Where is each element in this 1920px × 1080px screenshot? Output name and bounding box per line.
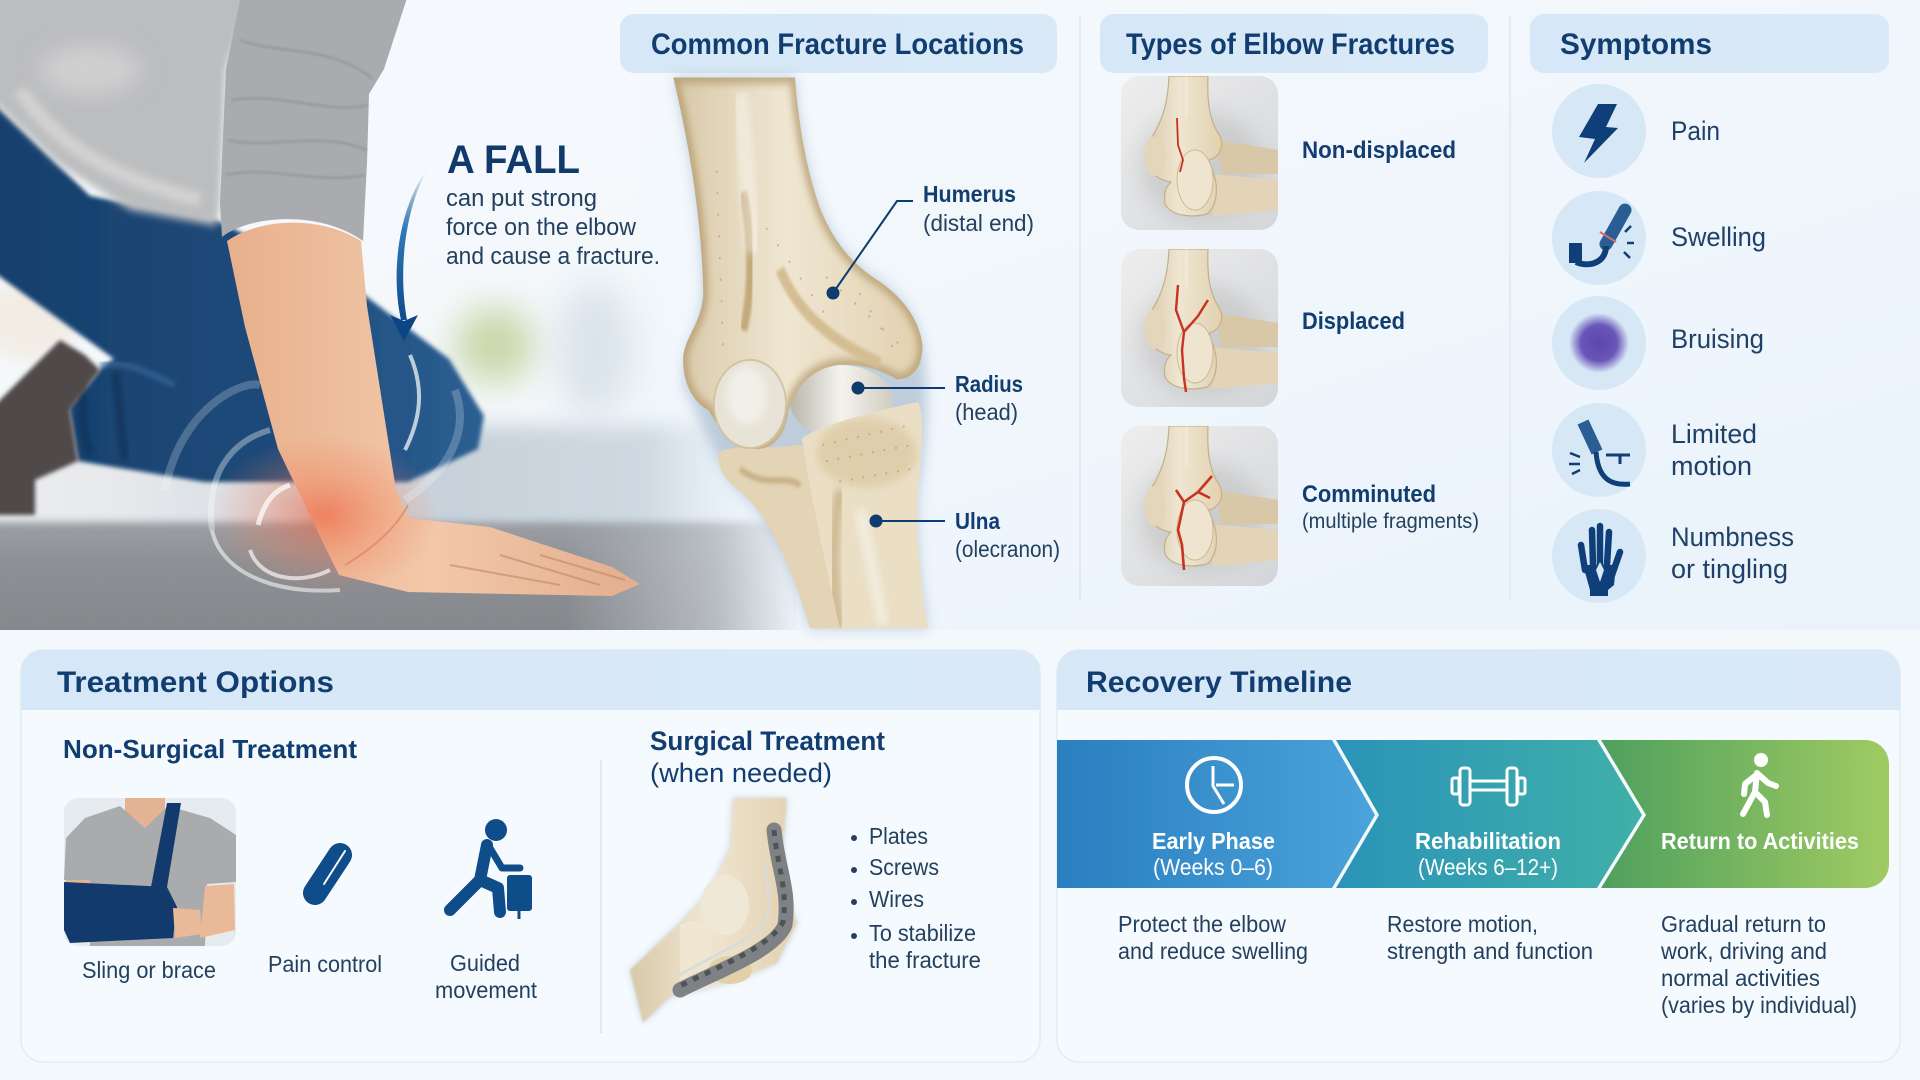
callout: radius: (head) — [955, 399, 1018, 425]
step: return to activities: Return to Activities — [1661, 828, 1859, 854]
callout: radius: Radius — [955, 371, 1023, 397]
panel: recovery timeline — [1057, 650, 1900, 1062]
symptom: bruising — [1552, 296, 1764, 390]
symptom: pain — [1552, 84, 1720, 178]
subheading: surgical: (when needed) — [650, 758, 832, 788]
text: rehabilitation details: strength and function — [1387, 938, 1593, 964]
shirt sleeve — [220, 0, 408, 241]
fracture: comminuted: (multiple fragments) — [1302, 510, 1479, 533]
illustration: elbow with plate — [630, 798, 797, 1023]
callout: a fall: A FALL — [447, 138, 580, 182]
text: return to activities details: (varies by individual) — [1661, 992, 1857, 1018]
icon: guided movement figure — [450, 819, 532, 919]
impact rings — [165, 355, 460, 591]
list: surgical hardware: To stabilize — [869, 920, 976, 946]
symptom: numbness or tingling: Numbness — [1671, 522, 1794, 552]
callout: radius — [852, 371, 1023, 425]
text: early phase details — [1118, 911, 1308, 964]
callout: humerus — [826, 181, 1034, 300]
callout: ulna — [870, 508, 1060, 562]
callout: a fall: force on the elbow — [446, 214, 637, 241]
subheading: surgical: Surgical Treatment — [650, 726, 885, 756]
jeans — [0, 80, 484, 482]
arrow: downward force — [390, 170, 427, 341]
panel: symptoms — [1530, 14, 1889, 603]
fracture: comminuted — [1121, 426, 1479, 586]
step: return to activities — [1601, 740, 1889, 888]
impact glow — [220, 448, 430, 586]
text: return to activities details — [1660, 911, 1857, 1018]
elbow bone illustration — [673, 78, 928, 628]
icon: pill — [315, 851, 345, 893]
fracture: displaced: Displaced — [1302, 308, 1405, 335]
heading pill: Symptoms — [1560, 28, 1712, 61]
list: surgical hardware: Screws — [869, 854, 939, 880]
ground — [0, 517, 790, 630]
heading bar: Recovery Timeline — [1086, 666, 1352, 699]
callout: a fall: can put strong — [446, 185, 597, 212]
heading bar: Treatment Options — [57, 666, 334, 699]
shoe — [0, 340, 100, 515]
text: early phase details: and reduce swelling — [1118, 938, 1308, 964]
icon: dumbbell — [1452, 768, 1525, 805]
blurred background scenery — [0, 0, 770, 545]
heading pill — [620, 14, 1057, 73]
fracture: non-displaced — [1121, 76, 1456, 236]
heading pill: Common Fracture Locations — [651, 28, 1024, 61]
fracture: comminuted: Comminuted — [1302, 481, 1436, 508]
arm and hand — [227, 223, 640, 596]
list: surgical hardware — [851, 823, 981, 973]
text: rehabilitation details — [1387, 911, 1593, 964]
text: rehabilitation details: Restore motion, — [1387, 911, 1538, 937]
panel: treatment options — [21, 650, 1040, 1062]
symptom: numbness or tingling: or tingling — [1671, 554, 1788, 584]
symptom: bruising: Bruising — [1671, 324, 1764, 354]
fracture: displaced — [1121, 249, 1405, 409]
step: rehabilitation: Rehabilitation — [1415, 828, 1561, 854]
illustration: sling — [64, 798, 236, 946]
text: return to activities details: Gradual return to — [1661, 911, 1826, 937]
text: return to activities details: work, driving and — [1660, 938, 1827, 964]
label: guided movement — [435, 950, 538, 1003]
step: early phase: Early Phase — [1152, 828, 1275, 854]
label: guided movement: movement — [435, 977, 538, 1003]
callout: ulna: Ulna — [955, 508, 1000, 534]
label: pain control: Pain control — [268, 951, 382, 977]
callout: a fall — [446, 138, 660, 270]
text: early phase details: Protect the elbow — [1118, 911, 1286, 937]
heading pill — [1100, 14, 1488, 73]
subheading: non-surgical: Non-Surgical Treatment — [63, 734, 357, 764]
fracture: non-displaced: Non-displaced — [1302, 137, 1456, 164]
label: sling or brace: Sling or brace — [82, 957, 216, 983]
subheading: surgical — [650, 726, 885, 788]
callout: humerus: Humerus — [923, 181, 1016, 207]
photo: person falling on outstretched arm — [0, 0, 820, 640]
heading bar — [21, 650, 1040, 710]
step: rehabilitation — [1336, 740, 1642, 888]
list: surgical hardware: the fracture — [869, 947, 981, 973]
shirt body — [0, 0, 260, 226]
heading pill: Types of Elbow Fractures — [1126, 28, 1455, 61]
step: early phase: (Weeks 0–6) — [1153, 854, 1273, 880]
list: surgical hardware: Plates — [869, 823, 928, 849]
callout: ulna: (olecranon) — [955, 536, 1060, 562]
label: guided movement: Guided — [450, 950, 520, 976]
heading pill — [1530, 14, 1889, 73]
text: return to activities details: normal activities — [1661, 965, 1820, 991]
symptom: swelling — [1552, 191, 1766, 285]
icon: clock — [1187, 758, 1241, 812]
symptom: limited motion: Limited — [1671, 419, 1757, 449]
heading bar — [1057, 650, 1900, 710]
top section background — [0, 0, 1920, 630]
symptom: pain: Pain — [1671, 116, 1720, 146]
icon: walking person — [1743, 753, 1776, 815]
step: early phase — [1057, 740, 1375, 888]
panel: types of elbow fractures — [1100, 14, 1488, 586]
symptom: numbness or tingling — [1552, 509, 1794, 603]
step: rehabilitation: (Weeks 6–12+) — [1418, 854, 1558, 880]
callout: a fall: and cause a fracture. — [446, 243, 660, 270]
callout: humerus: (distal end) — [923, 210, 1034, 236]
symptom: limited motion — [1552, 403, 1757, 497]
symptom: limited motion: motion — [1671, 451, 1752, 481]
panel: common fracture locations — [620, 14, 1060, 628]
symptom: swelling: Swelling — [1671, 222, 1766, 252]
list: surgical hardware: Wires — [869, 886, 924, 912]
